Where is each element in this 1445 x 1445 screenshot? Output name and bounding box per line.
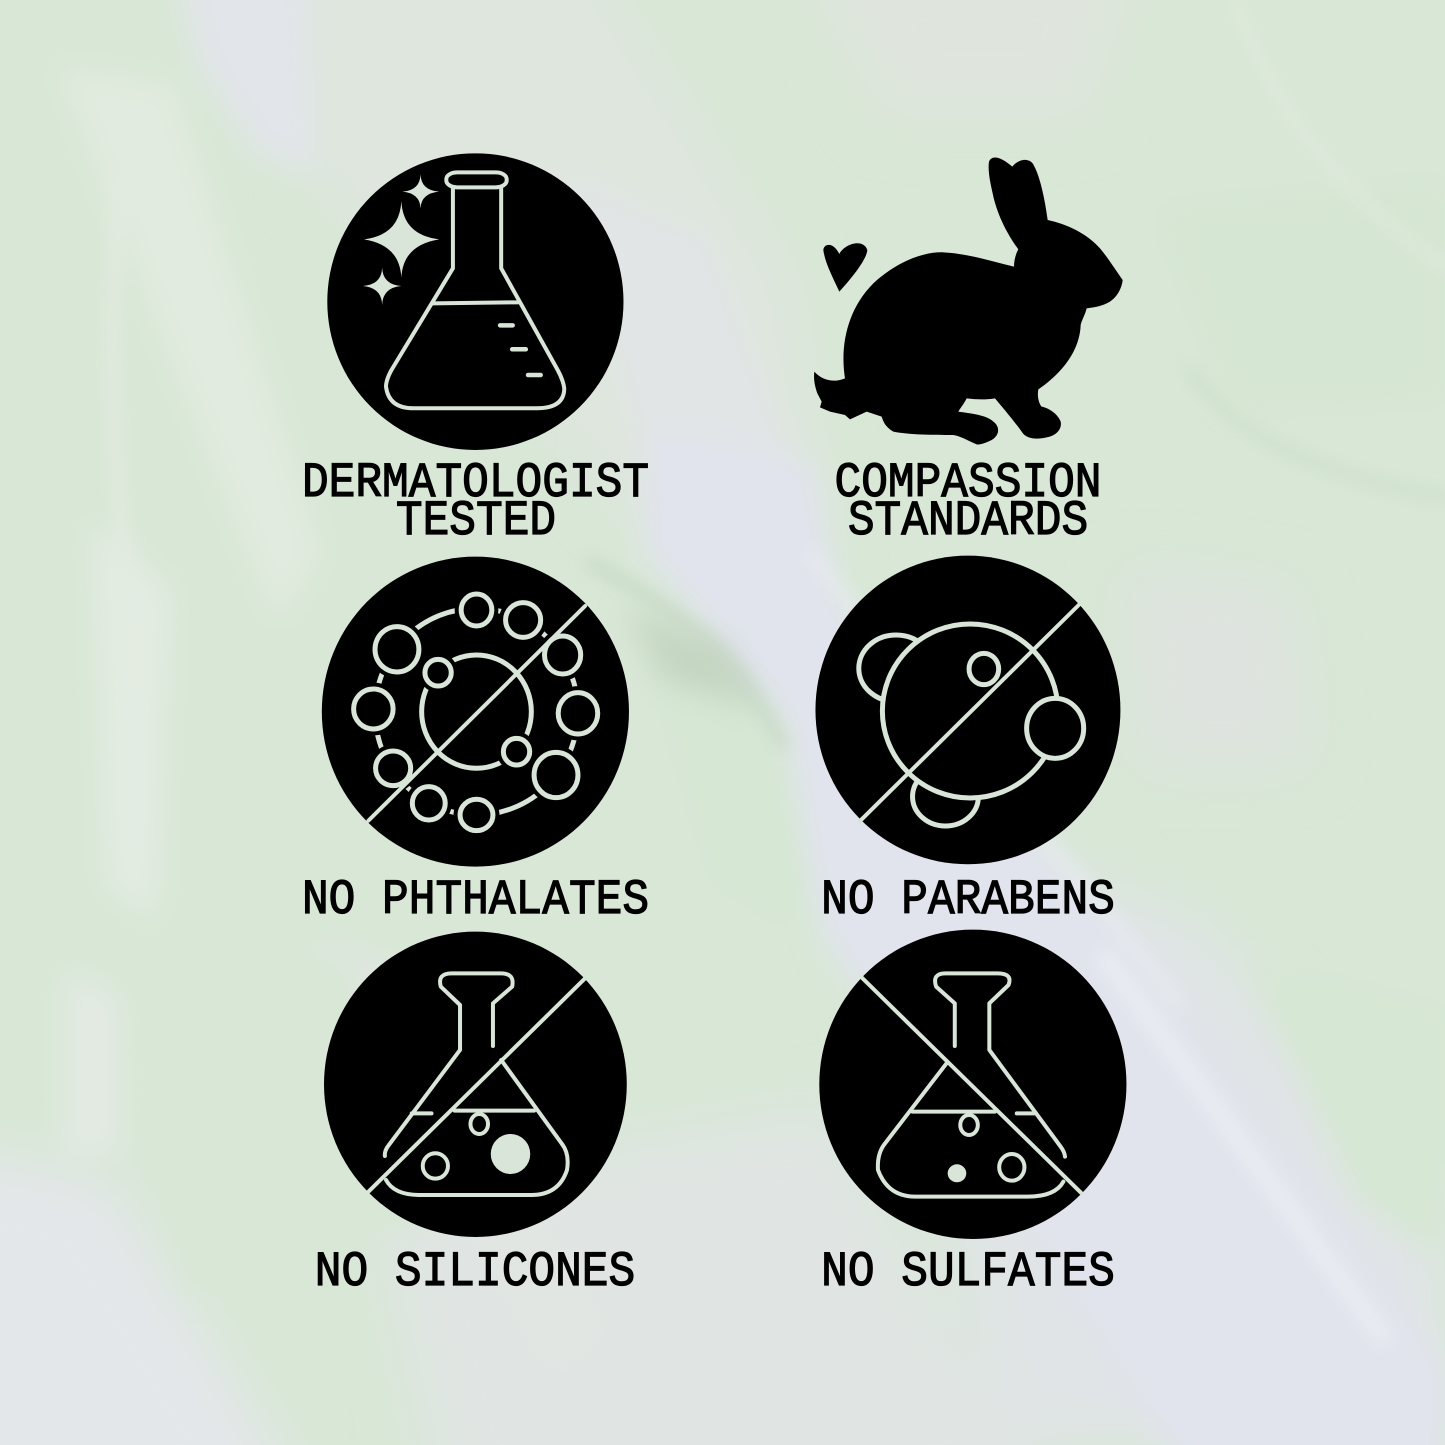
icon: rabbit silhouette with heart bbox=[814, 157, 1123, 444]
label: NO PHTHALATES bbox=[302, 873, 649, 929]
icon: flask with sparkles in black circle bbox=[327, 153, 623, 450]
icon: crossed-out bear-like molecule bbox=[815, 556, 1120, 864]
label: DERMATOLOGIST bbox=[302, 456, 649, 512]
label: NO PARABENS bbox=[821, 873, 1115, 929]
badge: dermatologist tested bbox=[302, 153, 649, 550]
icon: crossed-out molecule ring bbox=[322, 557, 629, 867]
badge: dermatologist tested: TESTED bbox=[396, 494, 556, 550]
badge: compassion standards: STANDARDS bbox=[848, 494, 1088, 550]
label: NO SILICONES bbox=[315, 1245, 635, 1301]
icon: crossed-out flask with bubbles bbox=[324, 932, 627, 1237]
badge: compassion standards bbox=[814, 157, 1123, 550]
label: COMPASSION bbox=[835, 456, 1101, 512]
badge: no silicones bbox=[315, 932, 635, 1301]
badge: no sulfates bbox=[819, 930, 1126, 1301]
badge: no parabens bbox=[815, 556, 1120, 929]
badge: no phthalates bbox=[302, 557, 649, 929]
label: NO SULFATES bbox=[821, 1245, 1115, 1301]
icon: crossed-out flask with bubbles bbox=[819, 930, 1126, 1239]
